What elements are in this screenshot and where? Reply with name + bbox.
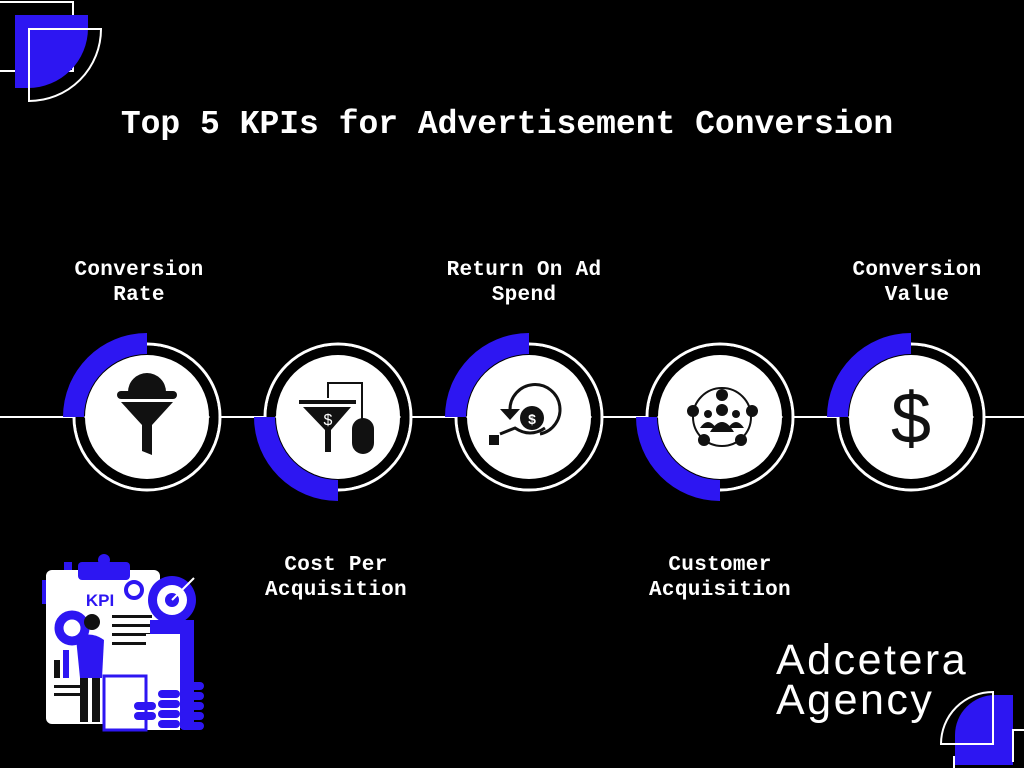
decoration: bottom-right corner shapes xyxy=(940,691,1024,768)
label: cost per acquisition xyxy=(265,554,407,602)
decoration: top-left corner shapes xyxy=(0,1,102,102)
logo: Adcetera Agency: Agency xyxy=(776,676,934,724)
logo: Adcetera Agency xyxy=(776,636,968,724)
label: return on ad spend xyxy=(447,259,601,307)
kpi circle: conversion rate xyxy=(63,333,220,490)
label: return on ad spend: Spend xyxy=(492,284,556,307)
kpi circle: customer acquisition xyxy=(636,344,793,501)
label: conversion rate: Rate xyxy=(113,284,165,307)
title: Top 5 KPIs for Advertisement Conversion xyxy=(121,106,893,143)
illustration: KPI clipboard xyxy=(42,554,204,732)
kpi circle: conversion value: $ xyxy=(891,379,931,459)
label: conversion rate: Conversion xyxy=(74,259,204,282)
illustration: KPI clipboard: KPI xyxy=(86,591,114,610)
label: customer acquisition: Acquisition xyxy=(649,579,791,602)
label: conversion value: Value xyxy=(885,284,949,307)
label: customer acquisition xyxy=(649,554,791,602)
kpi circle: return on ad spend xyxy=(445,333,602,490)
kpi circle: return on ad spend: $ xyxy=(528,411,536,427)
label: conversion value: Conversion xyxy=(852,259,982,282)
label: customer acquisition: Customer xyxy=(668,554,772,577)
kpi circle: cost per acquisition: $ xyxy=(324,412,333,429)
label: return on ad spend: Return On Ad xyxy=(447,259,601,282)
label: conversion rate xyxy=(74,259,204,307)
kpi circle: conversion value xyxy=(827,333,984,490)
kpi circle: cost per acquisition xyxy=(254,344,411,501)
timeline with KPI circles xyxy=(0,333,1024,501)
label: conversion value xyxy=(852,259,982,307)
logo: Adcetera Agency: Adcetera xyxy=(776,636,968,684)
label: cost per acquisition: Cost Per xyxy=(284,554,388,577)
label: cost per acquisition: Acquisition xyxy=(265,579,407,602)
